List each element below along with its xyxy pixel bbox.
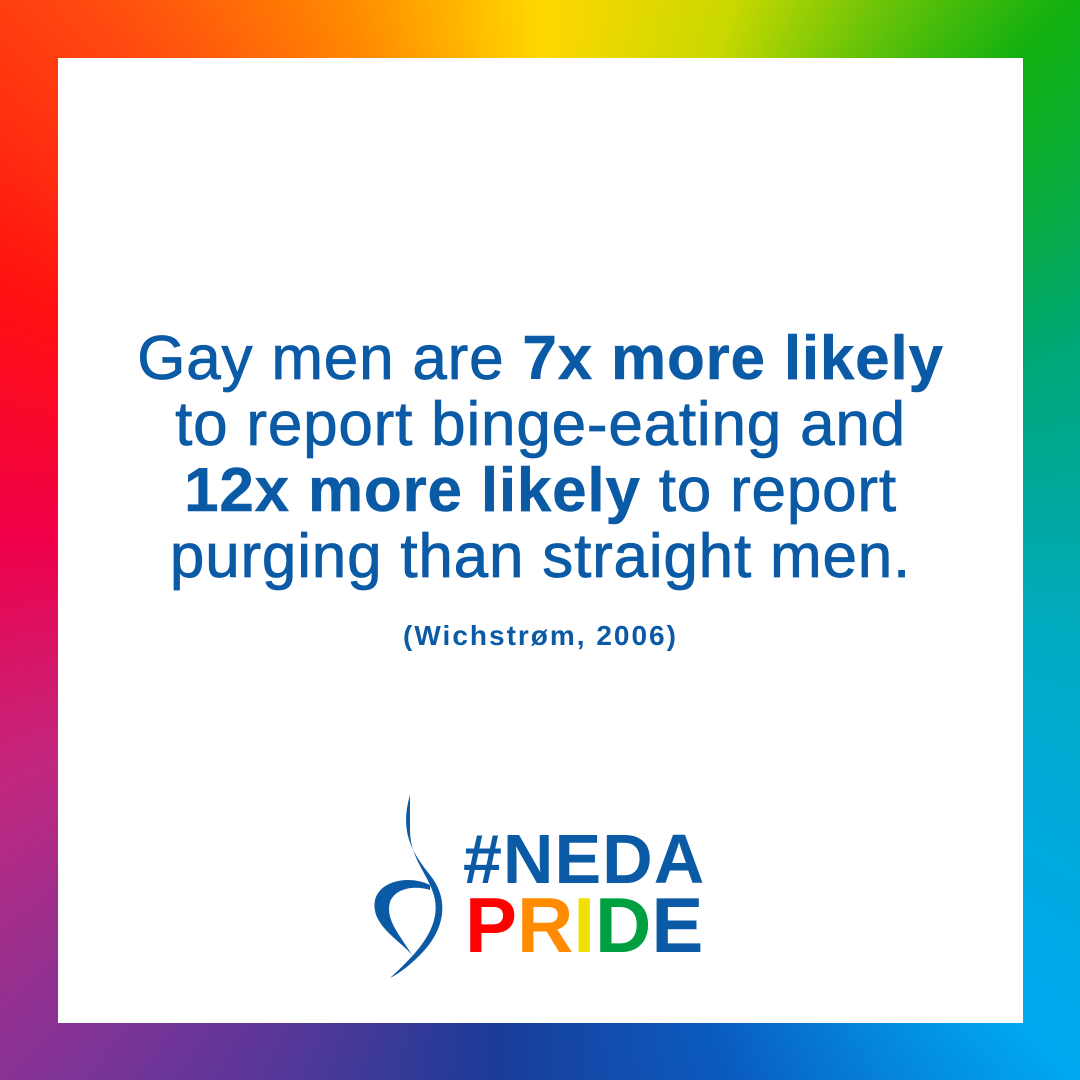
main statement: Gay men are 7x more likely — [137, 324, 944, 393]
main statement: 12x more likely to report — [184, 456, 897, 525]
main statement: to report binge-eating and — [175, 390, 906, 459]
main statement — [137, 324, 944, 591]
citation: (Wichstrøm, 2006) — [403, 620, 678, 651]
#NEDA text: #NEDA — [463, 820, 705, 898]
PRIDE text: PRIDE — [465, 881, 703, 969]
logo — [374, 795, 705, 978]
main statement: purging than straight men. — [170, 522, 911, 591]
white panel — [58, 58, 1023, 1023]
icon: NEDA figure — [374, 795, 442, 978]
